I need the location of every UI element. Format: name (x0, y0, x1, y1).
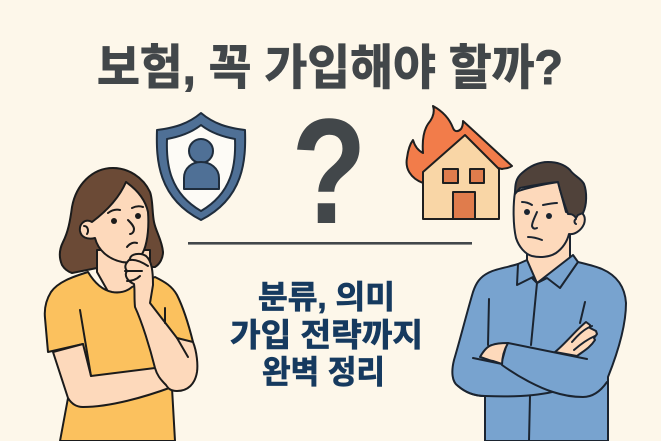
crossed arm (502, 343, 607, 397)
facial features (84, 206, 143, 247)
forearm and hand (125, 254, 197, 391)
shirt (452, 262, 626, 441)
neck (527, 230, 570, 283)
face (514, 182, 585, 257)
title: 보험, 꼭 가입해야 할까? (97, 42, 563, 95)
hair (515, 162, 586, 218)
subtitle: 가입 전략까지 (230, 317, 423, 353)
under hand (480, 343, 508, 364)
folds (80, 308, 188, 376)
shirt seams (488, 283, 595, 441)
subtitle (230, 279, 423, 390)
divider line (188, 242, 472, 245)
neck (97, 250, 150, 295)
facial features (522, 202, 576, 240)
icon: house on fire (407, 106, 512, 219)
hair (60, 168, 163, 273)
icon: shield with person (157, 113, 245, 220)
subtitle: 분류, 의미 (258, 279, 395, 315)
fingers (125, 260, 148, 281)
left arm (53, 344, 172, 407)
face (80, 182, 148, 262)
icon: question mark: ? (291, 88, 367, 256)
subtitle: 완벽 정리 (262, 354, 385, 390)
woman thinking (45, 168, 197, 441)
right hand (555, 322, 597, 356)
collar (517, 255, 578, 288)
t-shirt (45, 272, 193, 441)
man with crossed arms (452, 162, 626, 441)
